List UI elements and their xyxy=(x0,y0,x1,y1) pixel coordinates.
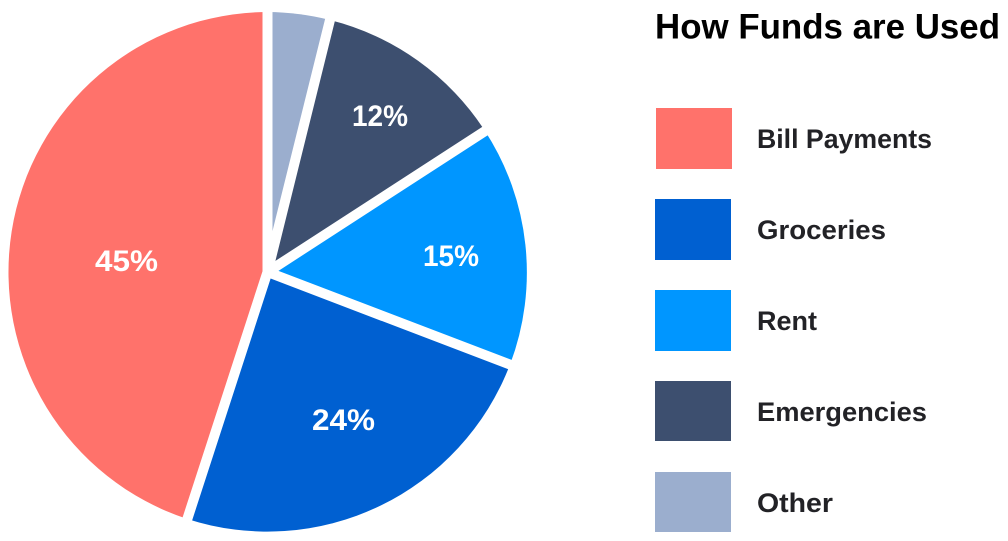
label: 24%: 24% xyxy=(312,404,375,437)
title: How Funds are Used xyxy=(655,8,1000,46)
slice separators xyxy=(183,0,522,531)
legend item: groceries xyxy=(655,199,886,260)
legend item: other: Other xyxy=(757,488,834,518)
legend xyxy=(655,108,932,532)
legend item: emergencies xyxy=(655,381,927,441)
slice: other 4% xyxy=(268,12,330,272)
slice: rent 15% xyxy=(268,131,527,365)
legend item: bill payments: Bill Payments xyxy=(757,124,932,154)
legend item: bill payments xyxy=(656,108,932,169)
slice: bill payments 45% xyxy=(8,12,267,519)
legend item: rent xyxy=(655,290,817,351)
label: 12%: 12% xyxy=(352,100,408,133)
pie chart xyxy=(8,0,527,532)
legend item: groceries: Groceries xyxy=(757,215,886,245)
slice: emergencies 12% xyxy=(268,20,485,272)
legend item: emergencies: Emergencies xyxy=(757,397,927,427)
label: 15%: 15% xyxy=(423,240,479,273)
legend item: other xyxy=(655,472,834,532)
label: 45%: 45% xyxy=(95,245,158,278)
legend item: rent: Rent xyxy=(757,306,817,336)
slice: groceries 24% xyxy=(187,272,510,532)
